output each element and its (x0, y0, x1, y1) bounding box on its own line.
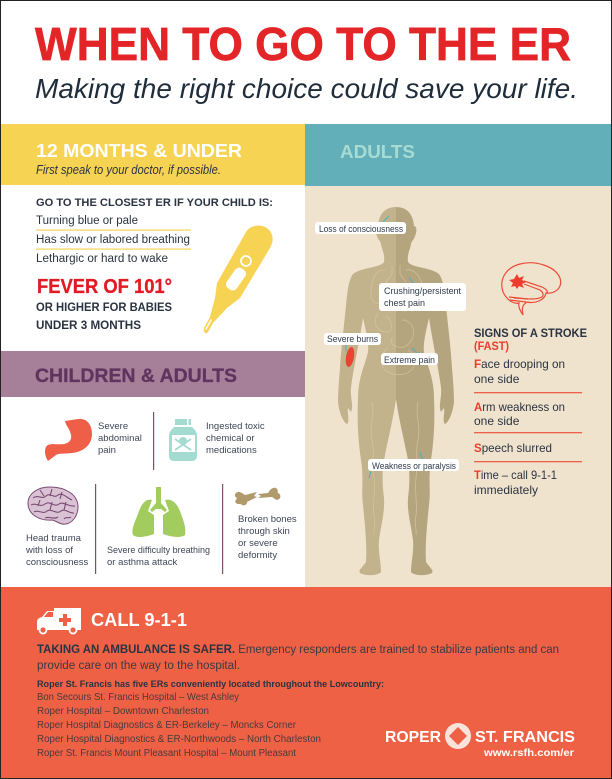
fever callout: FEVER OF 101° (37, 276, 172, 298)
hospital list: Roper Hospital Diagnostics & ER-Northwoods – North Charleston (37, 734, 321, 745)
stroke list: one side (474, 372, 520, 386)
fever callout: OR HIGHER FOR BABIES (36, 300, 172, 314)
header band: adults (305, 124, 612, 186)
text: difficulty breathing: or asthma attack (107, 557, 177, 568)
heading: signs of a stroke (474, 328, 587, 353)
text: difficulty breathing: Severe difficulty breathing (107, 545, 210, 556)
burn mark (344, 346, 356, 368)
symptom list: Turning blue or pale (36, 215, 138, 227)
heading: adults: ADULTS (340, 141, 415, 162)
text: abdominal pain (98, 421, 142, 456)
logo (385, 723, 575, 759)
hospital list: Roper Hospital Diagnostics & ER-Berkeley – Moncks Corner (37, 720, 297, 731)
orange background (1, 587, 612, 779)
pointer lines (346, 216, 423, 478)
text: head trauma: with loss of (25, 545, 73, 556)
symptom list (36, 215, 191, 265)
stroke list (474, 357, 582, 497)
text: toxic chemical (206, 421, 265, 456)
header band: children and adults (1, 351, 305, 397)
text: head trauma (25, 533, 89, 568)
text: broken bones (238, 514, 297, 561)
symptom list: Lethargic or hard to wake (36, 253, 168, 265)
ambulance text: TAKING AN AMBULANCE IS SAFER. Emergency responders are trained to stabilize patients and can (37, 644, 559, 656)
beige background (305, 186, 612, 587)
stroke list: one side (474, 414, 520, 428)
ambulance text: provide care on the way to the hospital. (37, 660, 240, 672)
text: broken bones: through skin (238, 526, 290, 537)
panel: children and adults (1, 351, 305, 574)
stroke list: Arm weakness on (474, 400, 565, 414)
fever callout: UNDER 3 MONTHS (36, 318, 141, 332)
icon: ambulance (37, 608, 81, 634)
icon: thermometer (204, 225, 273, 333)
hospital list: Roper St. Francis has five ERs conveniently located throughout the Lowcountry: (37, 679, 384, 690)
logo: ROPER (385, 729, 441, 746)
stroke list: Speech slurred (474, 441, 552, 455)
icon: stroke brain (502, 263, 561, 315)
body figure (338, 207, 454, 575)
text: toxic chemical: Ingested toxic (206, 421, 265, 432)
hospital list: Roper Hospital – Downtown Charleston (37, 706, 209, 717)
text: head trauma: Head trauma (26, 533, 82, 544)
icon: lungs (132, 487, 185, 537)
label: chest pain (379, 283, 466, 311)
label: extreme pain: Extreme pain (384, 355, 435, 365)
label: loss of consciousness: Loss of consciousness (319, 224, 403, 234)
panel: call 9-1-1 (1, 587, 612, 779)
panel: 12 months and under (1, 124, 305, 333)
subheading: speak to doctor: First speak to your doctor, if possible. (36, 163, 221, 177)
heading: call 9-1-1: CALL 9-1-1 (91, 609, 187, 630)
hospital list: Roper St. Francis Mount Pleasant Hospital – Mount Pleasant (37, 748, 296, 759)
heading: signs of a stroke: SIGNS OF A STROKE (474, 328, 587, 340)
organs and veins (371, 265, 424, 535)
label: chest pain: chest pain (384, 298, 425, 308)
icon: stroke burst (509, 274, 526, 289)
hospital list: Bon Secours St. Francis Hospital – West Ashley (37, 692, 239, 703)
lead text: GO TO THE CLOSEST ER IF YOUR CHILD IS: (36, 197, 273, 209)
header band: 12 months (1, 124, 305, 185)
logo: www.rsfh.com/er (483, 747, 574, 759)
text: difficulty breathing (107, 545, 210, 568)
panel: adults (305, 124, 612, 587)
label: weakness or paralysis: Weakness or paralysis (372, 461, 456, 471)
text: abdominal pain: pain (98, 445, 116, 456)
hospital list (37, 679, 384, 759)
text: toxic chemical: medications (206, 445, 257, 456)
stroke list: Face drooping on (474, 357, 565, 371)
icon: brain (28, 487, 78, 524)
label: severe burns: Severe burns (327, 334, 378, 344)
heading: signs of a stroke: (FAST) (474, 341, 509, 353)
heading: 12 months and under: 12 MONTHS & UNDER (36, 140, 242, 161)
icon: broken bone (235, 488, 280, 505)
stroke list: Time – call 9-1-1 (474, 468, 557, 482)
text: head trauma: consciousness (26, 557, 89, 568)
fever callout (36, 276, 172, 332)
icon: poison bottle (169, 419, 197, 461)
text: broken bones: or severe (238, 538, 278, 549)
symptom list: Has slow or labored breathing (36, 234, 190, 246)
text: abdominal pain: Severe (98, 421, 128, 432)
heading: children and adults: CHILDREN & ADULTS (35, 365, 237, 387)
stroke list: immediately (474, 483, 538, 497)
text: broken bones: Broken bones (238, 514, 297, 525)
text: broken bones: deformity (238, 550, 277, 561)
subtitle: Making the right choice could save your life. (35, 73, 578, 104)
logo: ST. FRANCIS (475, 729, 575, 746)
text: abdominal pain: abdominal (98, 433, 142, 444)
title: WHEN TO GO TO THE ER (35, 18, 571, 70)
label: chest pain: Crushing/persistent (384, 286, 461, 296)
ambulance text (37, 644, 559, 672)
text: toxic chemical: chemical or (206, 433, 255, 444)
icon: stomach (45, 419, 92, 461)
